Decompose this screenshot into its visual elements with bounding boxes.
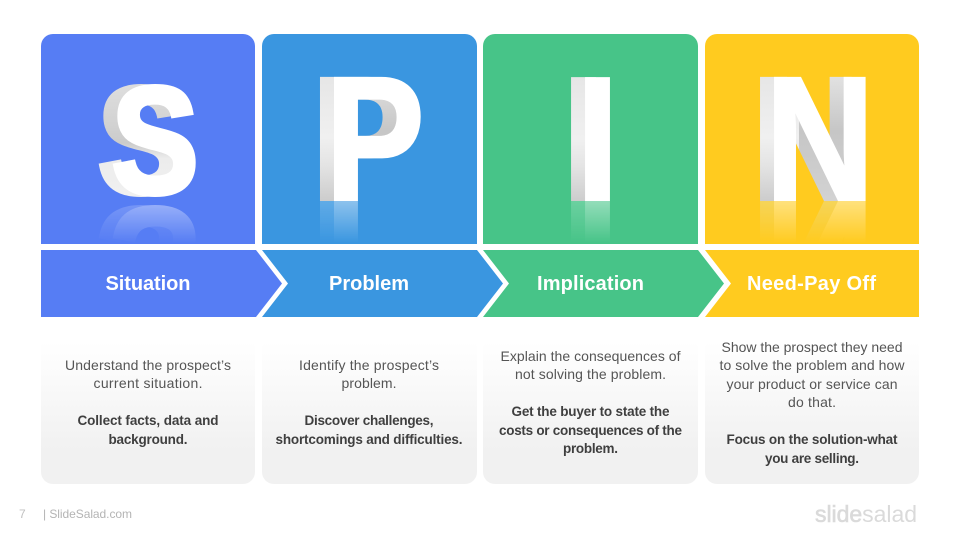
letter P 3D: P: [311, 41, 410, 237]
card: Need-Pay Off description: your product or service can: [726, 376, 898, 392]
card: Need-Pay Off description: [705, 335, 919, 484]
arrow: Need-Pay Off: Need-Pay Off: [747, 273, 876, 295]
card: Implication description: [483, 335, 698, 484]
letter P 3D: P: [311, 41, 410, 237]
letter S reflection: S: [98, 176, 185, 346]
card: Situation description: background.: [108, 432, 188, 447]
letter N 3D: N: [751, 40, 861, 237]
card: Situation description: [41, 335, 255, 484]
card: Need-Pay Off description: you are selling.: [765, 451, 859, 466]
letter N reflection: N: [751, 165, 861, 362]
letter P 3D: P: [325, 41, 424, 237]
card: Need-Pay Off description: do that.: [788, 394, 836, 410]
arrow: Implication: [483, 250, 724, 317]
card: Need-Pay Off description: Focus on the solution-what: [726, 432, 898, 447]
logo: slidesalad: slidesalad: [815, 501, 917, 527]
card: Problem description: Discover challenges,: [304, 413, 434, 428]
letter S 3D: S: [98, 56, 185, 226]
letter I reflection: I: [574, 162, 622, 363]
panel: letter N: [705, 34, 919, 362]
card: Problem description: [262, 335, 477, 484]
card: Implication description: Explain the consequences of: [500, 348, 681, 364]
card: Situation description: Understand the prospect’s: [65, 357, 231, 373]
letter N 3D: [760, 76, 866, 201]
panel: letter S: [41, 34, 255, 346]
card: Implication description: Get the buyer to state the: [512, 404, 670, 419]
panel: letter P: [262, 34, 477, 302]
letter N 3D: N: [751, 40, 861, 237]
card: Problem description: Identify the prospect’s: [299, 357, 439, 373]
letter I reflection: I: [560, 162, 608, 363]
arrow: Implication: Implication: [537, 273, 644, 295]
letter S reflection: [100, 205, 196, 238]
arrow: Need-Pay Off: [705, 250, 919, 317]
arrow: Situation: [41, 250, 282, 317]
letter I 3D: I: [560, 39, 608, 240]
letter N 3D: N: [765, 40, 875, 237]
card: Need-Pay Off description: Show the prospect they need: [722, 339, 902, 355]
card: Implication description: costs or consequences of the: [499, 423, 682, 438]
letter S reflection: S: [112, 176, 199, 346]
card: Implication description: not solving the problem.: [515, 366, 666, 382]
footer site name: | SlideSalad.com: [43, 507, 132, 521]
arrow: Situation: Situation: [106, 273, 190, 295]
letter P reflection: P: [311, 165, 410, 361]
card: Situation description: Collect facts, data and: [78, 413, 218, 428]
letter P reflection: P: [325, 165, 424, 361]
letter N reflection: N: [765, 165, 875, 362]
card: Implication description: problem.: [563, 441, 618, 456]
letter N reflection: [760, 201, 866, 239]
card: Problem description: shortcomings and difficulties.: [276, 432, 462, 447]
letter P 3D: [320, 76, 421, 201]
page number: 7: [19, 507, 26, 521]
letter I 3D: I: [574, 39, 622, 240]
card: Need-Pay Off description: to solve the problem and how: [720, 357, 905, 373]
panel: letter I: [483, 34, 698, 363]
arrow: Problem: Problem: [329, 273, 409, 295]
letter I reflection: [571, 201, 610, 238]
letter P reflection: [320, 201, 358, 238]
arrow: Problem: [262, 250, 503, 317]
card: Problem description: problem.: [342, 375, 396, 391]
card: Situation description: current situation.: [94, 375, 202, 391]
letter S 3D: S: [112, 56, 199, 226]
